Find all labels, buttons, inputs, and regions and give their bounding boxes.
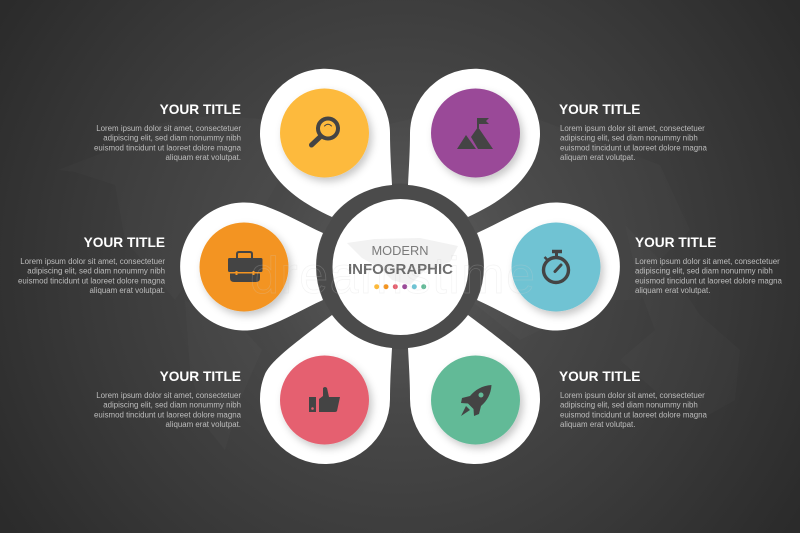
- body: middle left: [18, 257, 166, 295]
- petal: bottom right: [408, 315, 540, 464]
- body: top right: [560, 124, 708, 162]
- body: top left: Lorem ipsum dolor sit amet, consectetuer: [96, 124, 241, 133]
- teal circle: [512, 222, 600, 312]
- heading: bottom right: YOUR TITLE: [559, 369, 640, 384]
- heading: bottom left: YOUR TITLE: [160, 369, 241, 384]
- body: bottom left: adipiscing elit, sed diam nonummy nibh: [103, 401, 241, 410]
- body: middle left: adipiscing elit, sed diam nonummy nibh: [27, 267, 165, 276]
- text block: bottom right: [559, 369, 708, 429]
- text block: top left: [94, 102, 242, 162]
- petal: bottom left: [260, 315, 392, 464]
- heading: top right: YOUR TITLE: [559, 102, 640, 117]
- body: top right: aliquam erat volutpat.: [560, 153, 635, 162]
- body: top right: Lorem ipsum dolor sit amet, consectetuer: [560, 124, 705, 133]
- green circle: [431, 356, 520, 444]
- body: bottom right: aliquam erat volutpat.: [560, 420, 635, 429]
- body: bottom left: aliquam erat volutpat.: [166, 420, 241, 429]
- body: middle right: aliquam erat volutpat.: [635, 286, 710, 295]
- center badge: [332, 199, 468, 335]
- heading: top left: YOUR TITLE: [160, 102, 241, 117]
- body: top right: euismod tincidunt ut laoreet dolore magna: [560, 143, 708, 152]
- body: middle right: [635, 257, 783, 295]
- icon: briefcase: [228, 252, 262, 282]
- body: top left: adipiscing elit, sed diam nonummy nibh: [103, 134, 241, 143]
- heading: middle right: YOUR TITLE: [635, 235, 716, 250]
- body: top left: [94, 124, 242, 162]
- body: bottom right: [560, 391, 708, 429]
- body: middle left: euismod tincidunt ut laoreet dolore magna: [18, 276, 166, 285]
- petal: middle left: [180, 202, 323, 330]
- petal: middle right: [477, 202, 620, 330]
- body: top right: adipiscing elit, sed diam nonummy nibh: [560, 134, 698, 143]
- body: bottom right: euismod tincidunt ut laoreet dolore magna: [560, 410, 708, 419]
- center heading: MODERN: [372, 243, 428, 258]
- ring: [317, 184, 483, 350]
- body: bottom right: adipiscing elit, sed diam nonummy nibh: [560, 401, 698, 410]
- body: middle right: euismod tincidunt ut laoreet dolore magna: [635, 276, 783, 285]
- text block: middle right: [635, 235, 783, 295]
- world map backdrop: [58, 112, 740, 450]
- icon: mountain with flag: [457, 118, 493, 149]
- pink circle: [280, 356, 369, 444]
- heading: middle left: YOUR TITLE: [84, 235, 165, 250]
- petal: top right: [408, 69, 540, 217]
- icon: magnifying glass: [312, 118, 338, 145]
- body: middle right: Lorem ipsum dolor sit amet, consectetuer: [635, 257, 780, 266]
- purple circle: [431, 88, 520, 178]
- body: top left: aliquam erat volutpat.: [166, 153, 241, 162]
- yellow circle: [280, 88, 369, 178]
- body: bottom left: [94, 391, 242, 429]
- text block: bottom left: [94, 369, 242, 429]
- center mini map: [347, 238, 458, 285]
- body: middle left: aliquam erat volutpat.: [90, 286, 165, 295]
- orange circle: [200, 222, 288, 312]
- body: middle right: adipiscing elit, sed diam nonummy nibh: [635, 267, 773, 276]
- body: middle left: Lorem ipsum dolor sit amet, consectetuer: [20, 257, 165, 266]
- icon: stopwatch: [544, 252, 568, 282]
- body: bottom left: Lorem ipsum dolor sit amet, consectetuer: [96, 391, 241, 400]
- body: bottom left: euismod tincidunt ut laoreet dolore magna: [94, 410, 242, 419]
- watermark: dreamstime: [250, 247, 535, 305]
- icon: rocket: [461, 385, 492, 416]
- petal: top left: [260, 69, 392, 217]
- icon: thumbs up: [309, 387, 340, 412]
- body: bottom right: Lorem ipsum dolor sit amet, consectetuer: [560, 391, 705, 400]
- center dots: [374, 284, 426, 289]
- center subheading: INFOGRAPHIC: [348, 261, 453, 278]
- text block: top right: [559, 102, 708, 162]
- body: top left: euismod tincidunt ut laoreet dolore magna: [94, 143, 242, 152]
- text block: middle left: [18, 235, 166, 295]
